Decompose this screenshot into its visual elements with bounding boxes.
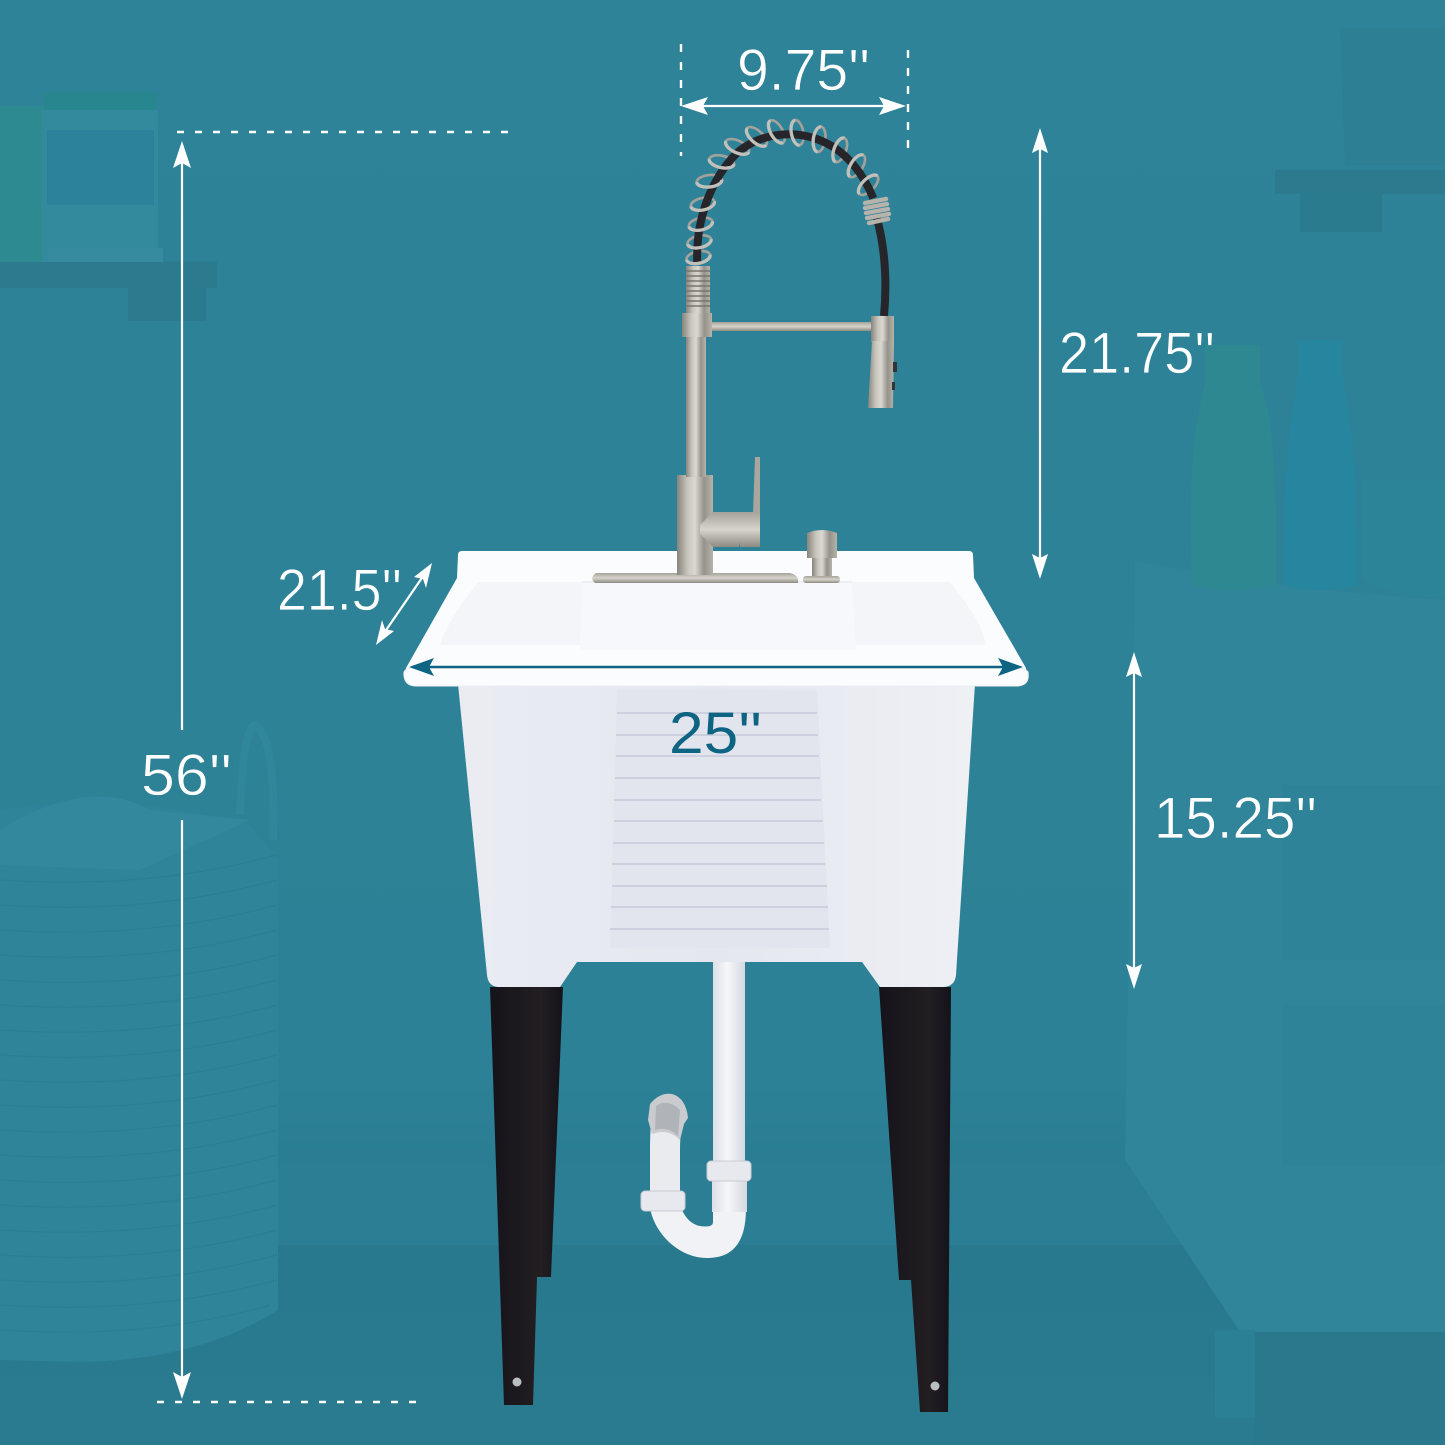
background: laundry basket [0,725,278,1362]
background: blue bottle [1283,340,1358,590]
spring coil and hose [685,118,882,266]
label: 21.5: 21.5'' [277,558,402,623]
left leg [490,987,563,1405]
sink top rim [404,551,1028,686]
right leg [879,987,951,1412]
faucet handle connector [700,512,739,547]
sprayer collar [871,316,894,342]
ribbed spring base [686,266,710,313]
drain: trap arm [650,1112,684,1194]
background: left shelf [0,262,217,321]
faucet collar [682,313,712,337]
dimension: spout reach 9.75 inches [681,38,908,156]
end coil rings [865,199,889,223]
dimension: sink front-to-back 21.5 inches [277,558,432,645]
background: green bottle [1191,345,1276,590]
faucet [592,118,897,583]
faucet lever [753,457,760,514]
faucet base [677,475,713,575]
drain: nut right [707,1161,751,1181]
sink legs [490,987,951,1412]
drain: nut left [641,1191,685,1211]
label: 9.75: 9.75'' [737,38,870,103]
washboard panel [610,690,830,948]
faucet handle knob [736,512,760,547]
sink drain pipe [641,960,751,1258]
background: folded towels [1362,480,1445,598]
background: jar [42,92,163,268]
soap dispenser [803,530,840,583]
basin interior [440,582,582,645]
dimension: faucet height 21.75 inches [1032,128,1215,579]
faucet post [686,337,706,477]
rim lip [404,668,1028,686]
sink tub body [458,684,975,987]
deck plate [592,573,798,583]
dimension: sink width 25 inches [409,658,1023,766]
sprayer head [868,341,897,408]
black hose to sprayer [876,215,885,316]
cross bar [712,322,872,331]
label: 21.75: 21.75'' [1059,321,1215,386]
background: green book [0,106,46,266]
dimension: basin depth 15.25 inches [1126,652,1317,989]
label: 25: 25'' [669,701,762,766]
background: top right shelf and plant pot [1275,28,1445,232]
label: 56: 56'' [141,743,232,808]
background: cabinet on right [1125,562,1445,1445]
drain: arm opening [648,1094,688,1140]
dimension: total height 56 inches [141,132,510,1402]
drain: U bend [650,1208,746,1258]
drain: collar [712,1178,747,1212]
label: 15.25: 15.25'' [1154,786,1317,851]
